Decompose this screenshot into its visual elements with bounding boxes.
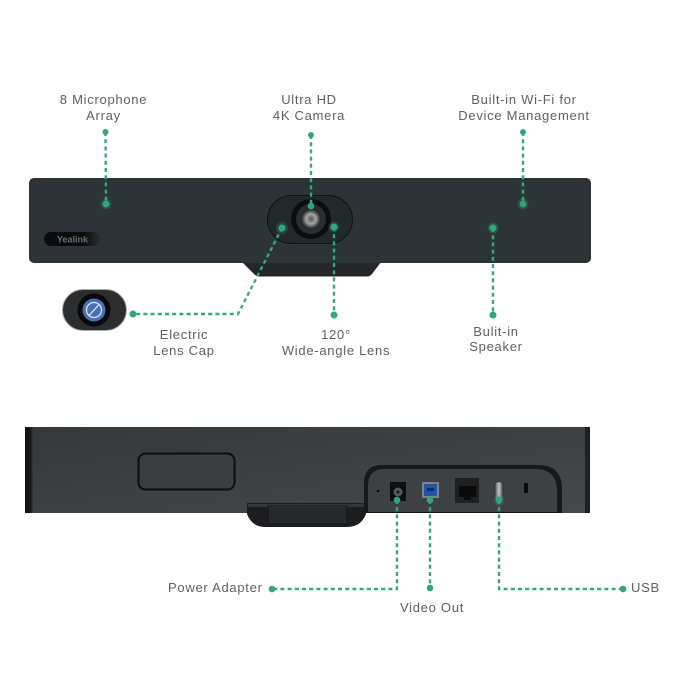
rear panel recess	[138, 454, 234, 490]
callout: Power Adapter	[168, 497, 400, 595]
callout: Ultra HD 4K Camera: Ultra HD	[281, 92, 337, 107]
callout: USB	[494, 494, 660, 595]
rear view device	[25, 427, 590, 527]
callout: 8 Microphone Array: 8 Microphone	[60, 92, 147, 107]
callout: Built-in Wi-Fi: Built-in Wi-Fi for	[471, 92, 577, 107]
callout: Power Adapter: Power Adapter	[168, 580, 263, 595]
port bay	[364, 465, 562, 513]
callout: 8 Microphone Array	[60, 92, 147, 210]
callout: Electric Lens Cap	[130, 222, 288, 358]
callout: Built-in Wi-Fi: Device Management	[458, 108, 590, 123]
callout: 8 Microphone Array: Array	[86, 108, 121, 123]
camera housing	[268, 196, 352, 244]
lock slot	[524, 483, 528, 493]
callout: Built-in Wi-Fi	[458, 92, 590, 210]
callout: Video Out	[400, 497, 464, 615]
callout: Video Out: Video Out	[400, 600, 464, 615]
callout: Built-in Speaker	[469, 222, 523, 354]
callout: Built-in Speaker: Speaker	[469, 339, 523, 354]
callout: Ultra HD 4K Camera	[273, 92, 345, 209]
Yealink badge	[44, 232, 100, 246]
callout: 120 degree lens	[282, 222, 390, 358]
port: video out	[422, 482, 439, 498]
port: power	[390, 482, 406, 501]
front view device	[29, 178, 591, 276]
fabric body	[29, 178, 591, 263]
port: USB	[495, 482, 503, 502]
hinge	[247, 503, 366, 527]
callout: Ultra HD 4K Camera: 4K Camera	[273, 108, 345, 123]
port: ethernet	[455, 478, 479, 503]
callout: USB: USB	[631, 580, 660, 595]
callout: 120 degree lens: Wide-angle Lens	[282, 343, 390, 358]
stand	[242, 262, 381, 276]
rear body	[25, 427, 590, 513]
indicator hole	[377, 490, 379, 492]
Yealink badge: Yealink	[57, 234, 89, 244]
callout: Built-in Speaker: Bulit-in	[473, 324, 519, 339]
icon: electric lens cap	[62, 290, 126, 330]
callout: Electric Lens Cap: Electric	[160, 327, 208, 342]
callout: Electric Lens Cap: Lens Cap	[153, 343, 215, 358]
callout: 120 degree lens: 120°	[321, 327, 351, 342]
